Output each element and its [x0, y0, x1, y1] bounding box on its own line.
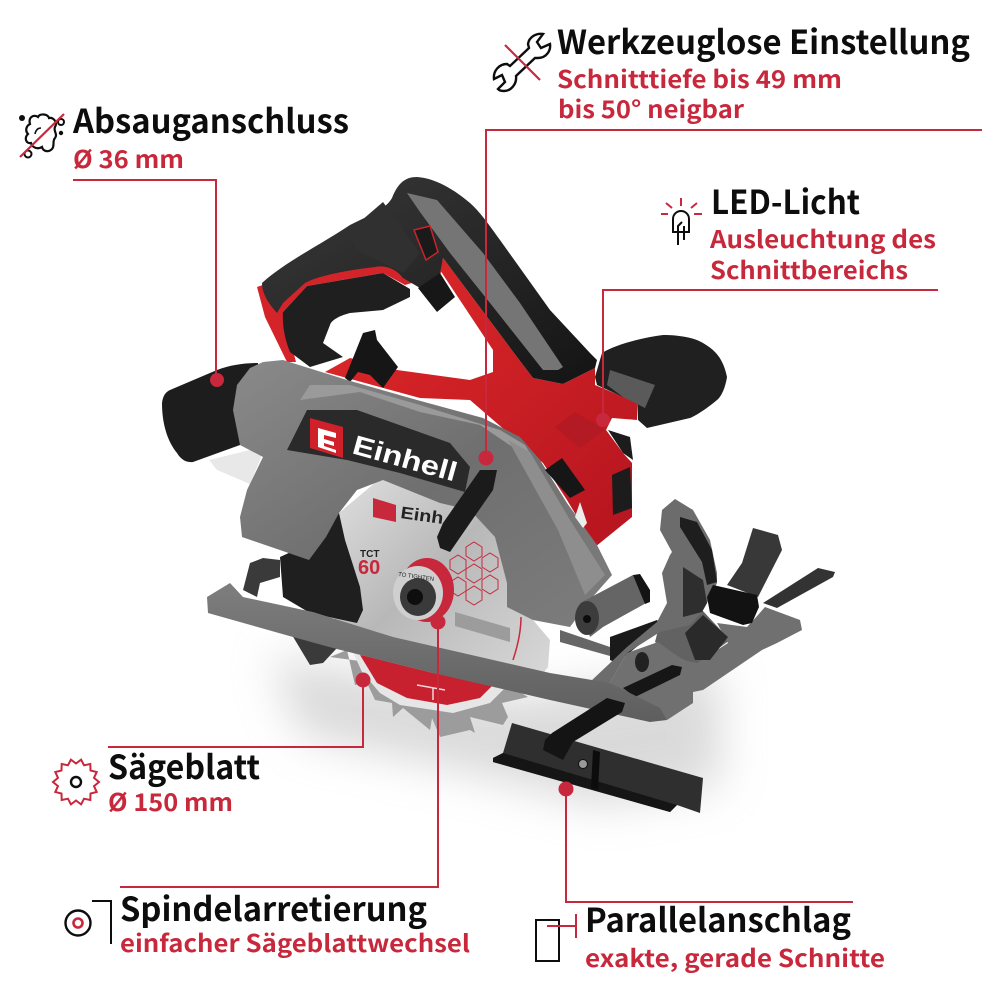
- logo wordmark: Einhell: [349, 430, 461, 487]
- red battery shading: [555, 412, 605, 448]
- guard right rib: [508, 440, 605, 595]
- icon: LED: [661, 198, 702, 245]
- saw blade upper disc: [333, 476, 550, 690]
- saw blade teeth: [330, 650, 528, 737]
- blade red segment: [360, 655, 493, 705]
- red arc on blade: [513, 617, 521, 660]
- product: cordless circular saw: [162, 177, 835, 813]
- icon: wrench: [494, 34, 550, 91]
- callout: Spindelarretierung: [66, 883, 470, 959]
- callout: Absauganschluss: [19, 95, 349, 175]
- base: black bracket: [610, 620, 662, 663]
- fence bracket strip: [591, 750, 600, 790]
- blade tooth count: 60: [358, 557, 380, 579]
- front base bar: [207, 583, 667, 722]
- flange inscription: TO TIGHTEN: [398, 572, 434, 583]
- textured grip patch: [347, 202, 420, 273]
- heading: Absauganschluss: [72, 95, 349, 143]
- knob highlight: [607, 370, 655, 408]
- rear knob: [595, 335, 727, 428]
- rear mount bracket: [243, 558, 280, 597]
- trigger block: [418, 273, 455, 312]
- black clip on motor: [345, 330, 398, 388]
- heading: Sägeblatt: [108, 741, 260, 789]
- fence lower lip: [493, 753, 677, 812]
- callout leader: LED-Licht: [596, 290, 938, 427]
- heading: Spindelarretierung: [120, 883, 427, 931]
- honeycomb pattern: [450, 542, 498, 605]
- icon: parallel guide: [536, 914, 576, 961]
- depth lock lever: [437, 470, 497, 552]
- logo band: [287, 410, 470, 492]
- parallel fence arm: [543, 698, 625, 760]
- ridged clamp lever: [685, 615, 728, 660]
- logo: white E: [318, 428, 336, 453]
- upper clamp lever: [727, 528, 782, 597]
- warning label: [575, 502, 587, 528]
- blade TCT label: TCT: [360, 549, 379, 560]
- ruler strip: [763, 568, 835, 608]
- callout leader: Werkzeuglose Einstellung: [478, 130, 982, 466]
- upper blade guard: [233, 360, 612, 627]
- faded battery slide: [209, 450, 262, 484]
- upper black grip and top bar: [262, 177, 597, 384]
- icon: saw blade: [53, 760, 99, 804]
- lower black grip: [283, 273, 410, 367]
- red motor body and arm: [325, 258, 638, 547]
- spindle flange: [393, 558, 454, 622]
- detail line 2: bis 50° neigbar: [558, 90, 745, 125]
- guard highlight: [300, 385, 540, 470]
- roller: [575, 574, 650, 637]
- blade red segment mark: [417, 685, 445, 700]
- arched upright bracket: [590, 499, 717, 683]
- heading: Werkzeuglose Einstellung: [557, 16, 970, 64]
- grey strip on top bar: [407, 193, 563, 370]
- bevel dial: [545, 458, 585, 498]
- blade dark band: [455, 612, 510, 642]
- blade white ring: [352, 650, 505, 713]
- base: plate behind upright: [655, 610, 730, 664]
- ground shadow: [270, 655, 720, 805]
- icon: dust: [19, 114, 64, 158]
- trigger lock button: [414, 226, 438, 260]
- base: right plate: [570, 607, 802, 720]
- detail: Ø 150 mm: [108, 783, 233, 818]
- callout leader: Spindelarretierung: [120, 614, 446, 887]
- clamp knob: [707, 585, 759, 625]
- heading: Parallelanschlag: [585, 894, 851, 942]
- fence screw: [578, 760, 588, 768]
- callout: Werkzeuglose Einstellung: [494, 16, 970, 125]
- callout: Sägeblatt: [53, 741, 260, 818]
- detail line 1: Ausleuchtung des: [709, 220, 936, 255]
- base: round hole: [635, 652, 649, 672]
- detail: exakte, gerade Schnitte: [585, 939, 885, 974]
- blade logo square: [373, 498, 396, 522]
- callout leader: Parallelanschlag: [558, 782, 853, 902]
- black battery shoulder: [608, 430, 633, 460]
- red handle frame: [257, 262, 445, 362]
- logo: red square: [310, 418, 343, 458]
- base: grey block behind roller: [560, 630, 610, 656]
- detail: einfacher Sägeblattwechsel: [120, 924, 470, 959]
- callout: LED-Licht: [661, 176, 936, 286]
- battery side black window: [612, 467, 632, 515]
- detail line 2: Schnittbereichs: [710, 251, 908, 286]
- callout: Parallelanschlag: [536, 894, 885, 974]
- parallel fence plate: [493, 723, 703, 813]
- inner black guard: [280, 513, 363, 623]
- detail line 1: Schnitttiefe bis 49 mm: [557, 60, 842, 95]
- heading: LED-Licht: [711, 176, 860, 224]
- callout leader: Sägeblatt: [108, 672, 370, 747]
- detail: Ø 36 mm: [73, 140, 184, 175]
- base: black slot: [623, 665, 682, 697]
- callout leader: Absauganschluss: [73, 180, 224, 387]
- icon: spindle lock: [66, 901, 111, 944]
- blade logo wordmark: Einh: [399, 503, 445, 528]
- lower guard below base: [292, 635, 337, 665]
- dust extraction port: [162, 363, 258, 462]
